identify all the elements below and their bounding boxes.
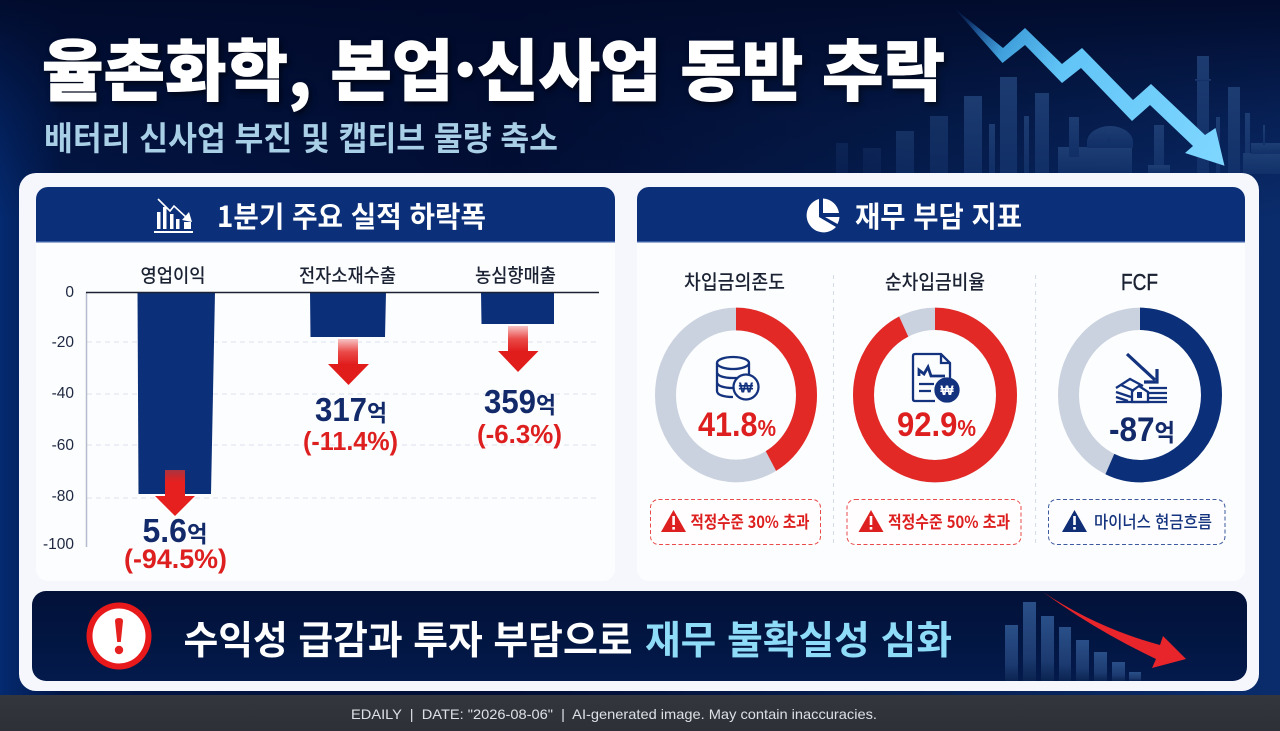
footer bbox=[0, 695, 1280, 731]
value: Nongshim bbox=[477, 383, 562, 449]
metric: free cash flow bbox=[1048, 269, 1225, 544]
donut: 41.8% bbox=[666, 319, 806, 471]
value: operating profit: (-94.5%) bbox=[124, 544, 227, 574]
heading: financial burden: 재무 부담 지표 bbox=[855, 194, 1022, 236]
panel header: financial burden bbox=[637, 187, 1245, 242]
y axis labels: -60 bbox=[52, 437, 74, 454]
icon: warning circle bbox=[86, 602, 152, 670]
value: -87억: -87억 bbox=[1109, 411, 1175, 449]
label: electronic materials export: 전자소재수출 bbox=[299, 261, 396, 288]
arrow: operating profit bbox=[155, 470, 195, 516]
callout: above 50%: 적정수준 50% 초과 bbox=[888, 508, 1010, 533]
value: 41.8%: 41.8% bbox=[698, 406, 776, 444]
donut: FCF bbox=[1068, 319, 1212, 471]
bar: operating profit bbox=[138, 292, 215, 494]
banner highlight: 재무 불확실성 심화 bbox=[645, 610, 952, 666]
chart: decline bars bbox=[43, 261, 599, 574]
main white card bbox=[19, 173, 1259, 691]
metric: debt dependence bbox=[650, 266, 820, 544]
bar: electronic materials export bbox=[310, 292, 386, 337]
icon: pie chart bbox=[807, 198, 840, 232]
y axis labels: -20 bbox=[52, 334, 74, 351]
y axis labels: 0 bbox=[65, 284, 74, 301]
icon: document and won: ₩ bbox=[940, 382, 954, 398]
icon: coins and won bbox=[717, 357, 758, 400]
value: electronic materials bbox=[303, 391, 398, 456]
y axis labels: -100 bbox=[43, 536, 74, 553]
donut: 92.9% bbox=[864, 319, 1006, 471]
title: 율촌화학, 본업·신사업 동반 추락 bbox=[42, 18, 945, 115]
illustration: falling blue arrow bbox=[954, 8, 1224, 166]
callout: above 30%: 적정수준 30% 초과 bbox=[690, 508, 810, 533]
metric: net debt ratio bbox=[847, 266, 1021, 544]
callout: negative cash flow: 마이너스 현금흐름 bbox=[1094, 508, 1212, 533]
subtitle: 배터리 신사업 부진 및 캡티브 물량 축소 bbox=[44, 112, 558, 160]
bar: Nongshim sales bbox=[481, 292, 554, 324]
y axis labels bbox=[43, 284, 74, 553]
y axis labels: -40 bbox=[52, 385, 74, 402]
arrow: red decline bbox=[1043, 592, 1186, 668]
icon: coins and won: ₩ bbox=[739, 380, 754, 396]
mini bars bbox=[1005, 602, 1141, 681]
icon: document and won bbox=[913, 354, 958, 402]
value: operating profit: 5.6억 bbox=[142, 512, 208, 549]
y axis labels: -80 bbox=[52, 488, 74, 505]
callout: above 30% bbox=[650, 500, 820, 544]
callout: negative cash flow bbox=[1048, 500, 1225, 544]
illustration: factory skyline bbox=[836, 56, 1280, 174]
label: operating profit: 영업이익 bbox=[140, 261, 206, 288]
value: electronic materials: (-11.4%) bbox=[303, 426, 398, 456]
metric: free cash flow: FCF bbox=[1121, 269, 1158, 295]
panel: quarterly decline bbox=[36, 187, 615, 581]
value: Nongshim: (-6.3%) bbox=[477, 419, 562, 449]
heading: quarterly decline: 1분기 주요 실적 하락폭 bbox=[217, 194, 486, 236]
panel: financial burden bbox=[637, 187, 1245, 581]
metric: debt dependence: 차입금의존도 bbox=[684, 266, 785, 295]
value: electronic materials: 317억 bbox=[315, 391, 387, 428]
icon: falling arrow and cash house bbox=[1116, 354, 1167, 402]
icon: declining bar chart bbox=[154, 199, 193, 233]
banner text: 수익성 급감과 투자 부담으로 bbox=[184, 610, 632, 666]
arrow: electronic materials bbox=[328, 339, 369, 385]
footer: EDAILY | DATE: "2026-08-06" | AI-generated image. May contain inaccuracies. bbox=[351, 706, 877, 722]
panel header: quarterly decline bbox=[36, 187, 615, 242]
banner: conclusion bbox=[32, 591, 1247, 681]
callout: above 50% bbox=[847, 500, 1021, 544]
value: Nongshim: 359억 bbox=[484, 383, 556, 420]
metric: net debt ratio: 순차입금비율 bbox=[885, 266, 985, 295]
value: 92.9%: 92.9% bbox=[897, 406, 976, 444]
label: Nongshim sales: 농심향매출 bbox=[475, 261, 556, 288]
value: operating profit bbox=[124, 512, 227, 574]
arrow: Nongshim bbox=[498, 326, 538, 372]
